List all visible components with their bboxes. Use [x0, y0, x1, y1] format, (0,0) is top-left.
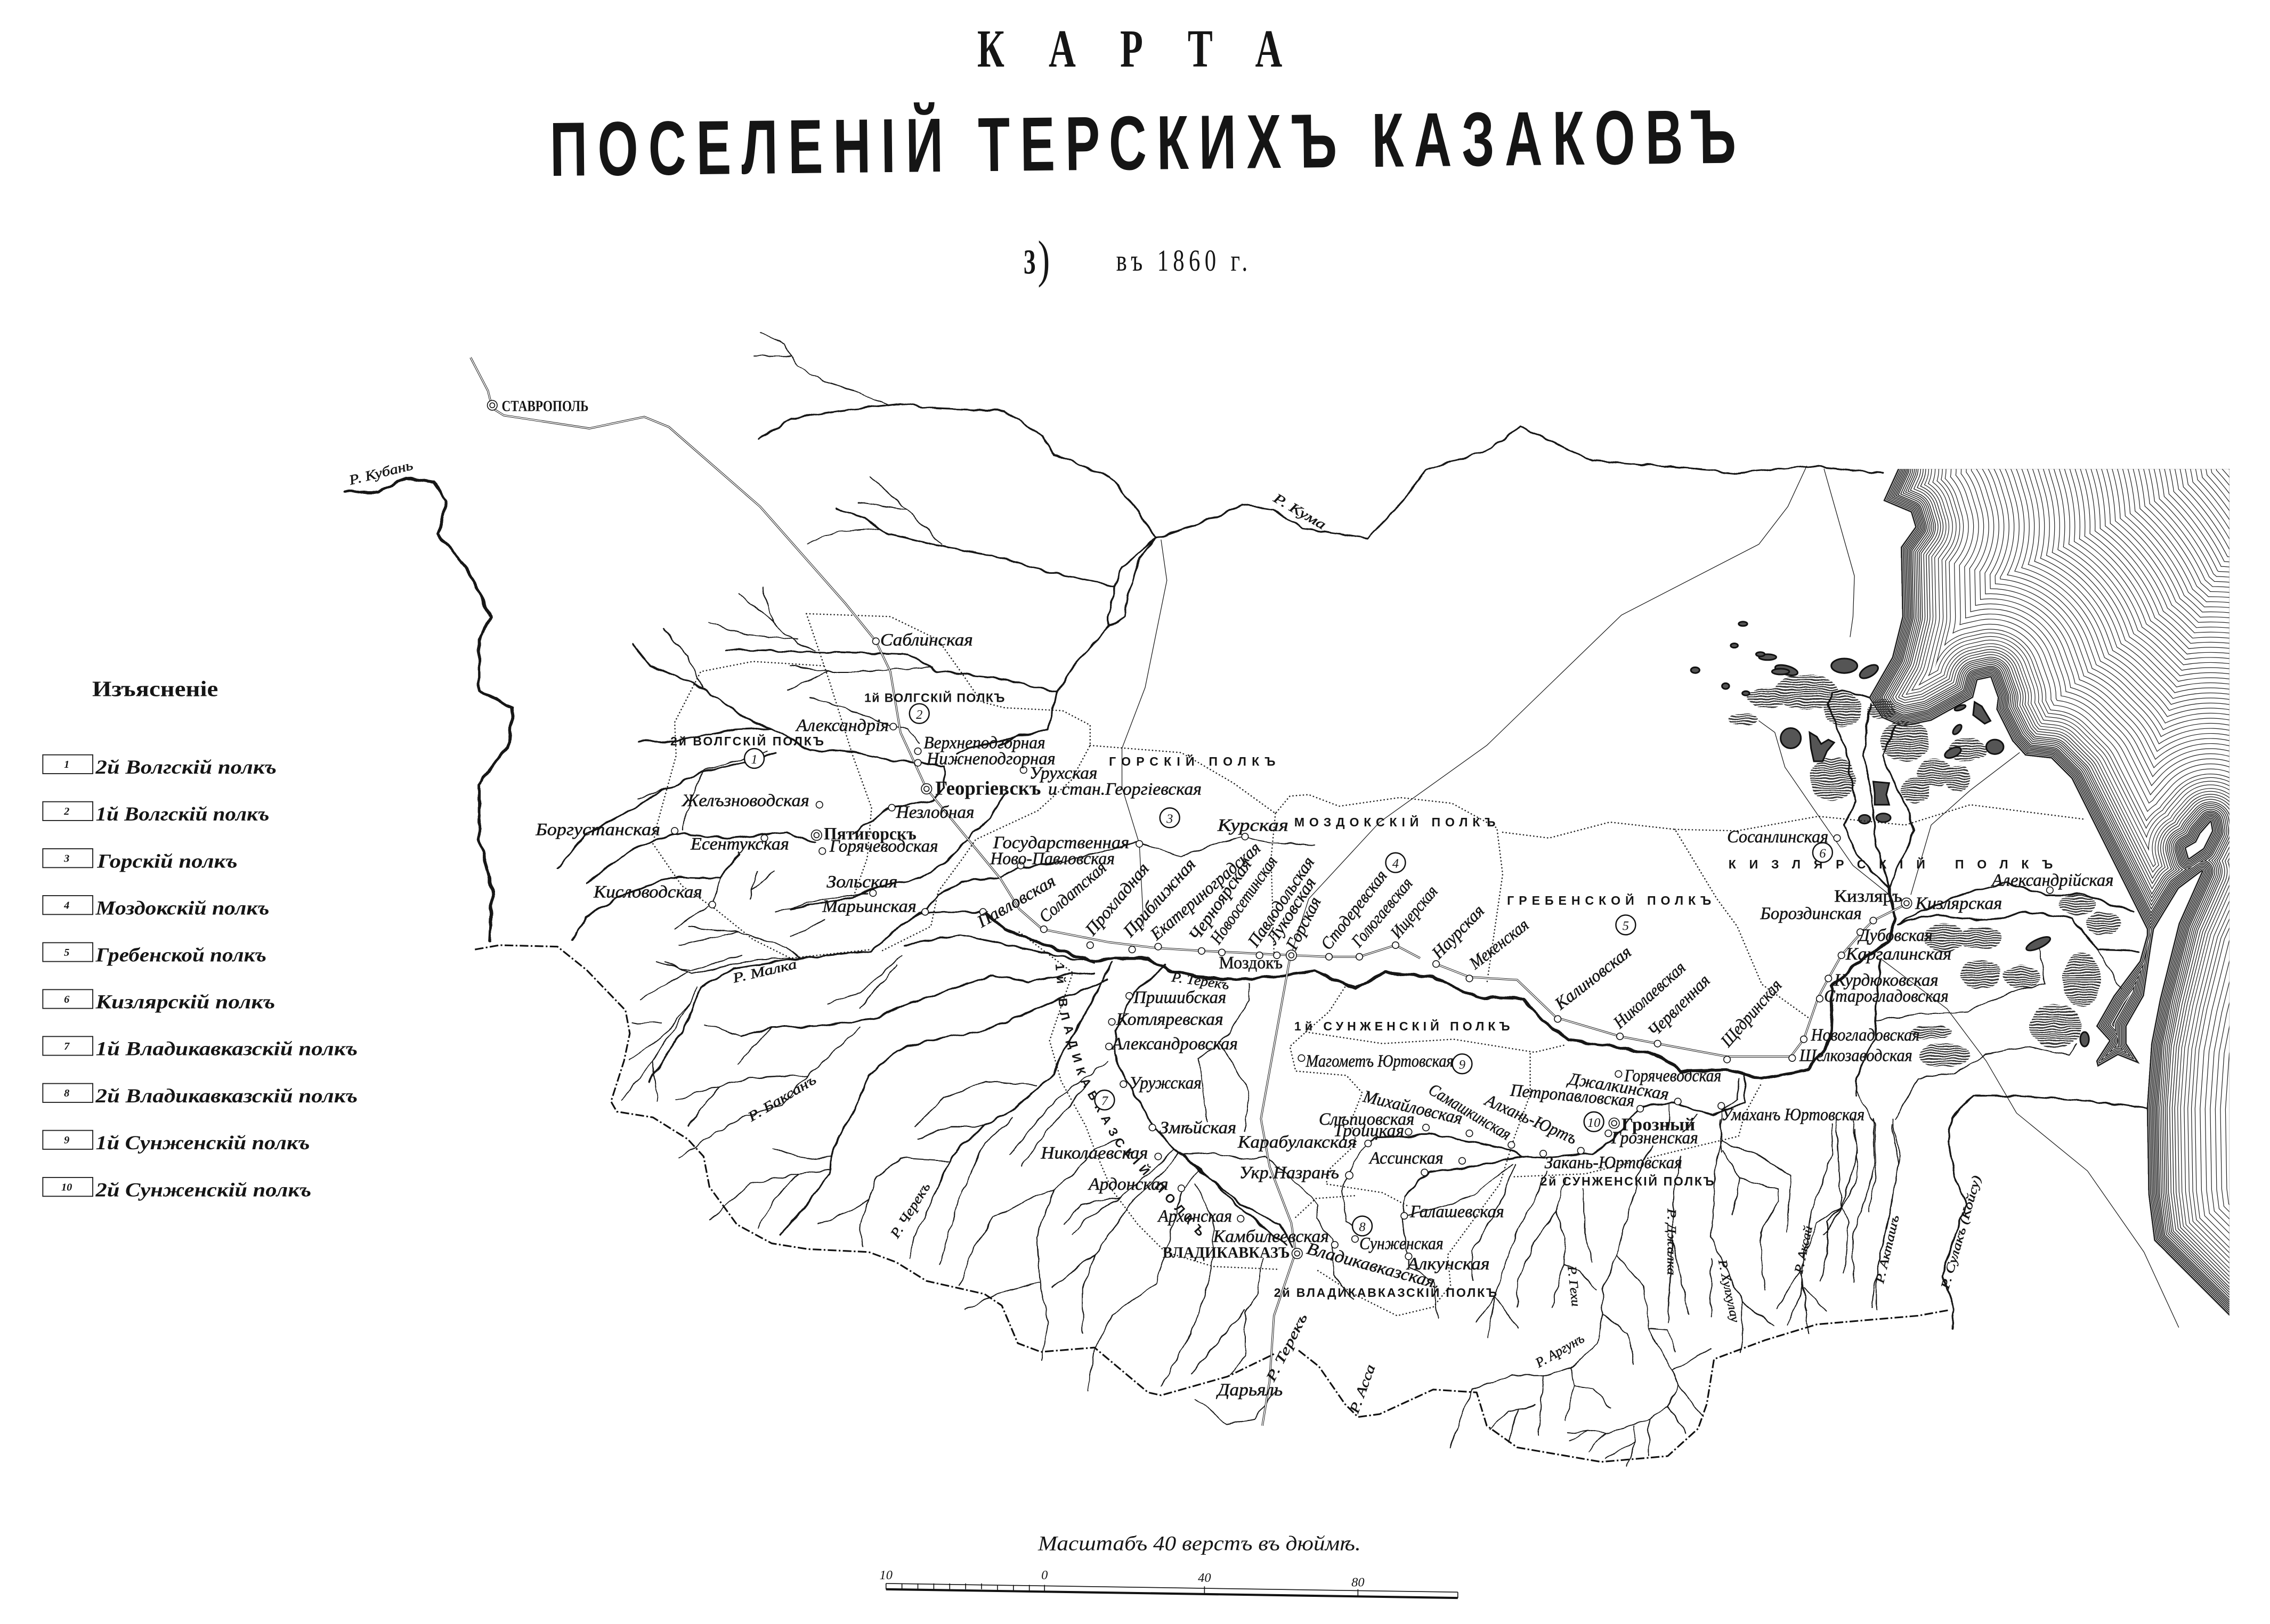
- settlement labels: Александрія: [795, 716, 889, 735]
- regiment number circles: 6: [1819, 847, 1826, 861]
- lakes: [1691, 622, 2089, 1046]
- river labels: Р. Терекъ: [1170, 969, 1230, 993]
- settlement labels: Умаханъ Юртовская: [1721, 1106, 1864, 1125]
- settlement labels: Александровская: [1111, 1035, 1238, 1054]
- legend row 8: 8: [64, 1087, 69, 1099]
- river labels: Р. Акташъ: [1872, 1214, 1902, 1285]
- regiment area labels: 2й ВОЛГСКІЙ ПОЛКЪ: [670, 734, 824, 748]
- legend panel: [43, 677, 358, 1200]
- regiment area labels: 1й ВЛАДИКАВКАЗСКІЙ ПОЛКЪ: [1055, 964, 1202, 1236]
- river labels: [347, 457, 1983, 1416]
- heading: КАРТА: КАРТА: [977, 19, 1283, 78]
- settlement labels: Ищерская: [1387, 882, 1442, 943]
- legend row 1: 1: [64, 759, 69, 770]
- regiment number circles: 3: [1166, 811, 1173, 826]
- plate number: 3: [1024, 243, 1036, 281]
- river labels: Р. Кубань: [347, 457, 415, 488]
- settlement labels: Червленная: [1644, 971, 1714, 1041]
- regiment area labels: [670, 691, 2053, 1300]
- river labels: Р. Хулхулау: [1716, 1258, 1742, 1324]
- river labels: Р. Черекъ: [887, 1180, 933, 1241]
- marsh hatching patches: [1729, 675, 2121, 1067]
- settlement labels: Дарьяль: [1216, 1381, 1283, 1400]
- settlement labels: Новогладовская: [1811, 1026, 1919, 1045]
- regiment number circles: [744, 704, 1833, 1236]
- settlement labels: Каргалинская: [1845, 945, 1951, 964]
- plate number: ): [1037, 231, 1050, 288]
- settlement labels: Прохладная: [1081, 859, 1153, 940]
- settlement labels: Боргустанская: [535, 820, 660, 839]
- settlement labels: Ардонская: [1088, 1175, 1168, 1194]
- settlement labels: Голюгаевская: [1348, 874, 1416, 951]
- Caspian Sea contour hatching: [1869, 469, 2230, 1316]
- settlement labels: Бороздинская: [1760, 904, 1862, 923]
- settlement labels: Курская: [1217, 816, 1288, 835]
- settlement labels: Алхань-Юртъ: [1481, 1090, 1580, 1148]
- settlement labels: Новоосетинская: [1206, 852, 1282, 948]
- settlement labels: Наурская: [1428, 902, 1488, 963]
- legend row 10: 2й Сунженскій полкъ: [95, 1179, 311, 1200]
- legend row 6: 6: [64, 994, 70, 1005]
- legend row 3: 3: [63, 852, 69, 864]
- settlement labels: Ново-Павловская: [990, 849, 1115, 868]
- regiment number circles: 2: [916, 708, 922, 722]
- legend row 3: Горскій полкъ: [96, 850, 238, 872]
- settlement labels: Самашкинская: [1425, 1080, 1514, 1144]
- title: [549, 19, 1737, 288]
- river labels: Р. Аксай: [1791, 1224, 1815, 1275]
- settlement labels: Щедринская: [1717, 976, 1786, 1051]
- settlement labels: Желъзноводская: [682, 791, 809, 810]
- river labels: Р. Кума: [1270, 490, 1329, 532]
- city markers: [488, 400, 1912, 1258]
- regiment area labels: 1й ВОЛГСКІЙ ПОЛКЪ: [864, 691, 1005, 705]
- settlement labels: Александрійская: [1991, 871, 2113, 890]
- settlement labels: Грозненская: [1611, 1128, 1698, 1148]
- river labels: Р. Терекъ: [1263, 1311, 1310, 1384]
- legend heading: Изъясненіе: [92, 677, 218, 701]
- settlement labels: Горская: [1282, 894, 1325, 953]
- settlement labels: Мекенская: [1465, 915, 1533, 973]
- scale numbers: 40: [1198, 1571, 1211, 1585]
- settlement labels: Марьинская: [822, 897, 917, 916]
- regiment area labels: ГОРСКІЙ ПОЛКЪ: [1109, 754, 1276, 768]
- rivers: [345, 333, 2147, 1466]
- regiment area labels: 2й СУНЖЕНСКІЙ ПОЛКЪ: [1541, 1174, 1714, 1188]
- settlement labels: Кисловодская: [593, 882, 702, 902]
- scale numbers: 10: [880, 1568, 893, 1582]
- settlement labels: Горячеводская: [1624, 1066, 1721, 1085]
- settlement labels: Владикавказская: [1304, 1239, 1437, 1292]
- post roads (double line): [471, 358, 1908, 1426]
- year: въ 1860 г.: [1116, 243, 1247, 277]
- legend row 6: Кизлярскій полкъ: [95, 991, 275, 1013]
- settlement labels: Николаевская: [1610, 958, 1690, 1033]
- legend row 10: [43, 1178, 311, 1200]
- settlement labels: Джалкинская: [1566, 1069, 1670, 1104]
- settlement labels: ВЛАДИКАВКАЗЪ: [1163, 1244, 1290, 1262]
- heading: ПОСЕЛЕНІЙ ТЕРСКИХЪ КАЗАКОВЪ: ПОСЕЛЕНІЙ ТЕРСКИХЪ КАЗАКОВЪ: [549, 94, 1737, 193]
- regiment number circles: 8: [1359, 1220, 1366, 1234]
- legend row 6: [43, 989, 275, 1013]
- legend row 7: 1й Владикавказскій полкъ: [95, 1038, 358, 1060]
- settlement labels: Нижнеподгорная: [926, 749, 1056, 768]
- regiment number circles: 10: [1587, 1116, 1600, 1130]
- legend row 4: [43, 896, 269, 919]
- legend row 5: [43, 943, 266, 966]
- settlement labels: [501, 399, 2113, 1400]
- settlement labels: Стодеревская: [1317, 866, 1391, 954]
- settlement labels: Приближная: [1119, 855, 1199, 941]
- settlement labels: Сунженская: [1359, 1234, 1444, 1253]
- main rivers: Kuban, Kuma, Terek, Sunzha: [345, 404, 2147, 1327]
- settlement labels: Пятигорскъ: [824, 825, 917, 844]
- legend row 2: 1й Волгскій полкъ: [95, 803, 269, 825]
- settlement labels: Дубовская: [1857, 926, 1933, 945]
- legend row 8: [43, 1084, 358, 1107]
- settlement labels: Галашевская: [1409, 1203, 1504, 1222]
- settlement labels: Моздокъ: [1219, 953, 1283, 972]
- scale numbers: 0: [1041, 1568, 1048, 1582]
- regiment number circles: 1: [751, 752, 758, 767]
- legend row 5: 5: [64, 947, 69, 959]
- settlement labels: Пришибская: [1133, 988, 1226, 1008]
- legend row 7: [43, 1036, 358, 1060]
- settlement labels: Шелкозаводская: [1799, 1046, 1912, 1065]
- scale ruler: [886, 1584, 1458, 1598]
- scale numbers: [880, 1568, 1365, 1589]
- settlement labels: Черноярская: [1185, 856, 1255, 945]
- legend row 7: 7: [64, 1041, 70, 1052]
- settlement labels: Николаевская: [1040, 1144, 1148, 1163]
- thin roads and hair lines: [1122, 466, 2179, 1327]
- settlement labels: Михайловская: [1361, 1087, 1464, 1128]
- legend row 8: 2й Владикавказскій полкъ: [95, 1085, 358, 1107]
- river labels: Р. Асса: [1346, 1362, 1379, 1416]
- regiment number circles: 5: [1623, 919, 1629, 933]
- settlement labels: Уружская: [1129, 1074, 1202, 1093]
- settlement labels: Старогладовская: [1824, 987, 1949, 1006]
- settlement labels: Змѣйская: [1160, 1118, 1236, 1138]
- settlement labels: Екатериноградская: [1147, 839, 1264, 944]
- settlement labels: Алкунская: [1406, 1254, 1490, 1273]
- settlement labels: Петропавловская: [1509, 1081, 1635, 1111]
- regiment boundaries (dotted): [653, 614, 2085, 1316]
- scale caption: Масштабъ 40 верстъ въ дюймѣ.: [1037, 1531, 1361, 1555]
- regiment area labels: КИЗЛЯРСКІЙ ПОЛКЪ: [1729, 857, 2053, 871]
- settlement labels: Павлодольская: [1244, 854, 1318, 951]
- settlement labels: Солдатская: [1035, 858, 1110, 927]
- settlement labels: Камбилеевская: [1213, 1227, 1329, 1246]
- settlement labels: Ассинская: [1368, 1149, 1444, 1168]
- legend row 2: [43, 802, 269, 825]
- settlement labels: Калиновская: [1551, 943, 1635, 1014]
- river labels: Р. Баксанъ: [744, 1071, 819, 1125]
- river labels: Р. Сулакъ (Койсу): [1937, 1174, 1983, 1291]
- settlement labels: Есентукская: [690, 835, 789, 854]
- river labels: Р. Гехи: [1565, 1265, 1583, 1307]
- legend row 9: 9: [64, 1134, 69, 1146]
- scale bar: [880, 1531, 1458, 1598]
- regiment area labels: 1й СУНЖЕНСКІЙ ПОЛКЪ: [1294, 1019, 1510, 1033]
- settlement labels: Государственная: [993, 833, 1129, 852]
- regiment number circles: 9: [1459, 1058, 1465, 1072]
- tributaries: [621, 333, 2121, 1466]
- settlement labels: Магометъ Юртовская: [1306, 1052, 1454, 1071]
- settlement labels: СТАВРОПОЛЬ: [501, 399, 588, 415]
- legend row 3: [43, 849, 238, 872]
- settlement labels: Павловская: [974, 872, 1059, 932]
- settlement labels: Закань-Юртовская: [1545, 1153, 1682, 1172]
- settlement labels: Архонская: [1157, 1207, 1232, 1226]
- legend row 4: 4: [63, 899, 69, 911]
- settlement labels: Слѣпцовская: [1319, 1110, 1414, 1129]
- settlement markers: [488, 400, 2053, 1260]
- settlement labels: и стан.Георгіевская: [1048, 779, 1202, 799]
- settlement labels: Луковская: [1262, 874, 1320, 948]
- settlement labels: Сосанлинская: [1727, 827, 1828, 847]
- settlement labels: Георгіевскъ: [935, 777, 1041, 799]
- regiment area labels: ГРЕБЕНСКОЙ ПОЛКЪ: [1507, 893, 1711, 907]
- settlement labels: Укр.Назранъ: [1239, 1163, 1339, 1182]
- river labels: Р. Джалка: [1665, 1208, 1679, 1275]
- settlement labels: Троицкая: [1333, 1122, 1404, 1141]
- settlement labels: Кизлярская: [1915, 894, 2002, 913]
- settlement labels: Верхнеподгорная: [923, 733, 1045, 752]
- settlement labels: Урухская: [1029, 764, 1097, 783]
- regiment area labels: МОЗДОКСКІЙ ПОЛКЪ: [1294, 815, 1495, 829]
- settlement labels: Курдюковская: [1834, 971, 1939, 990]
- settlement labels: Горячеводская: [829, 837, 938, 856]
- scale numbers: 80: [1351, 1575, 1365, 1589]
- legend row 9: 1й Сунженскій полкъ: [95, 1132, 310, 1154]
- settlement labels: Зольская: [826, 872, 897, 891]
- legend row 9: [43, 1131, 310, 1154]
- river labels: Р. Малка: [731, 956, 798, 986]
- legend row 1: [43, 755, 277, 778]
- legend row 2: 2: [63, 806, 69, 817]
- settlement labels: Кизляръ: [1834, 887, 1902, 906]
- legend row 10: 10: [61, 1181, 72, 1193]
- regiment number circles: 4: [1392, 857, 1399, 871]
- settlement labels: Котляревская: [1116, 1010, 1223, 1029]
- state border (dash-dot): [475, 945, 1950, 1462]
- legend row 5: Гребенской полкъ: [95, 944, 266, 966]
- settlement labels: Грозный: [1622, 1115, 1695, 1135]
- regiment number circles: 7: [1101, 1094, 1109, 1108]
- settlement labels: Незлобная: [896, 803, 974, 822]
- settlement labels: Карабулакская: [1237, 1133, 1357, 1152]
- regiment area labels: 2й ВЛАДИКАВКАЗСКІЙ ПОЛКЪ: [1274, 1285, 1497, 1300]
- river labels: Р. Аргунъ: [1533, 1330, 1587, 1371]
- settlement labels: Саблинская: [880, 631, 973, 650]
- legend row 4: Моздокскій полкъ: [95, 897, 269, 919]
- legend row 1: 2й Волгскій полкъ: [95, 756, 277, 778]
